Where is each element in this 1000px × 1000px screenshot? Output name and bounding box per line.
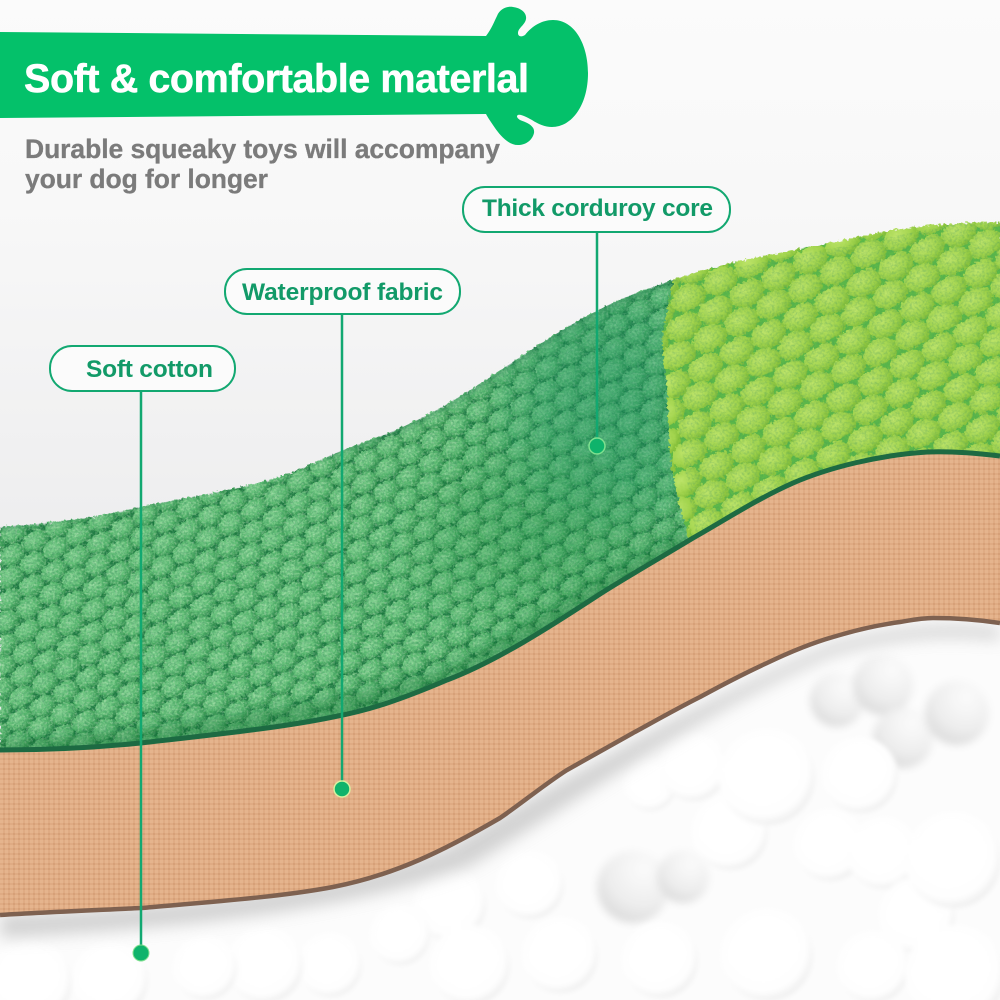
subtitle: Durable squeaky toys will accompany — [25, 134, 500, 164]
title: Soft & comfortable materlal — [24, 57, 529, 101]
callout: thick corduroy core — [463, 187, 730, 454]
cotton filling layer — [0, 618, 1000, 1000]
callout: thick corduroy core: Thick corduroy core — [482, 195, 713, 222]
callout: waterproof fabric — [225, 269, 460, 797]
subtitle: your dog for longer — [25, 164, 268, 194]
tan waterproof fabric layer — [0, 452, 1000, 915]
callout: soft cotton — [50, 346, 235, 961]
subtitle — [25, 134, 500, 194]
green corduroy plush layer — [0, 270, 710, 775]
shadow under tan layer — [0, 625, 1000, 938]
callout: soft cotton: Soft cotton — [86, 356, 213, 383]
lime green plush section — [660, 221, 1000, 538]
banner with dog bone shape — [0, 7, 588, 145]
dark seam between plush and tan layer — [0, 452, 1000, 750]
callout: waterproof fabric: Waterproof fabric — [242, 279, 443, 306]
